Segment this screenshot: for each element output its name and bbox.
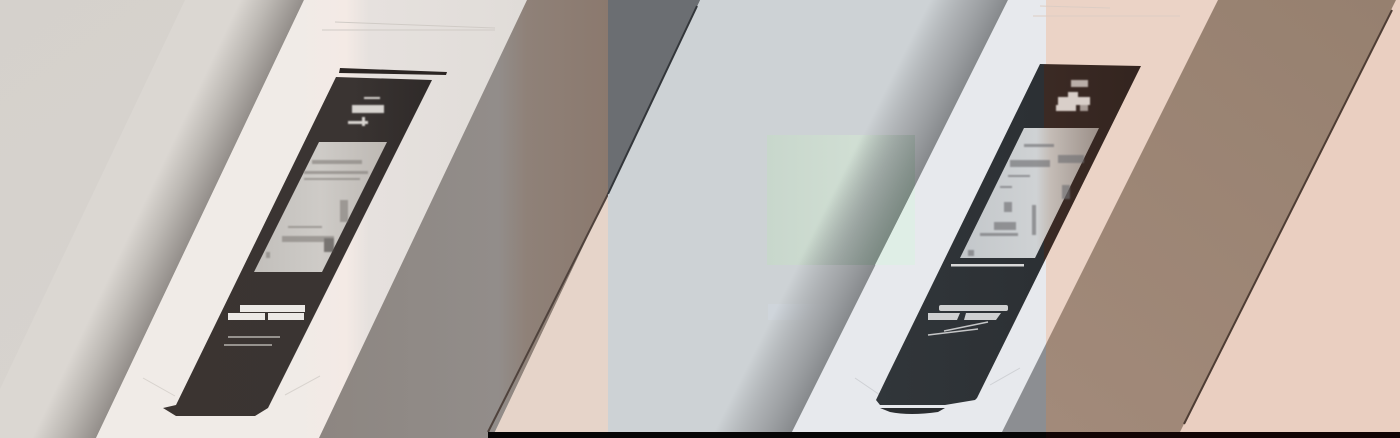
left appliance door xyxy=(96,0,527,438)
right buttons xyxy=(928,305,1008,320)
right edge line xyxy=(1184,10,1392,424)
lower grey sliver xyxy=(999,344,1046,438)
shaded side of the left appliance xyxy=(319,0,608,438)
pale blue label xyxy=(768,304,886,320)
left display marks xyxy=(266,160,368,258)
left display screen xyxy=(254,142,387,272)
left photo xyxy=(0,0,608,438)
left panel lines xyxy=(224,337,280,345)
right panel lines xyxy=(928,322,988,335)
right appliance door, warm side xyxy=(1046,0,1218,344)
right display screen xyxy=(960,128,1099,258)
white strip under the right display xyxy=(951,264,1024,266)
wall edge line xyxy=(608,6,697,194)
left control panel xyxy=(163,68,447,416)
wall, left photo xyxy=(0,0,608,438)
door panel outline xyxy=(855,6,1180,395)
pink panel xyxy=(492,194,608,438)
dark corner xyxy=(608,0,700,194)
bottom dark arc xyxy=(880,408,945,414)
left logo marks xyxy=(348,97,384,126)
right logo marks xyxy=(1056,80,1090,111)
right appliance door, cool side xyxy=(789,0,1046,438)
green tint on the door xyxy=(875,186,915,265)
black bottom strip xyxy=(488,432,1400,438)
panel edge line xyxy=(488,194,608,432)
right display marks xyxy=(968,144,1084,256)
shaded side of the right appliance xyxy=(1046,0,1396,438)
right control panel xyxy=(876,64,1141,414)
shadow beside the left appliance xyxy=(0,0,304,438)
right photo xyxy=(608,0,1400,438)
left buttons xyxy=(228,305,305,320)
shadow beside the right appliance xyxy=(711,0,1008,438)
green patch xyxy=(767,135,915,265)
door panel outline xyxy=(143,22,495,396)
wall, right photo xyxy=(608,0,1046,438)
warm side background xyxy=(1046,0,1400,438)
green patch shadow xyxy=(795,135,915,265)
